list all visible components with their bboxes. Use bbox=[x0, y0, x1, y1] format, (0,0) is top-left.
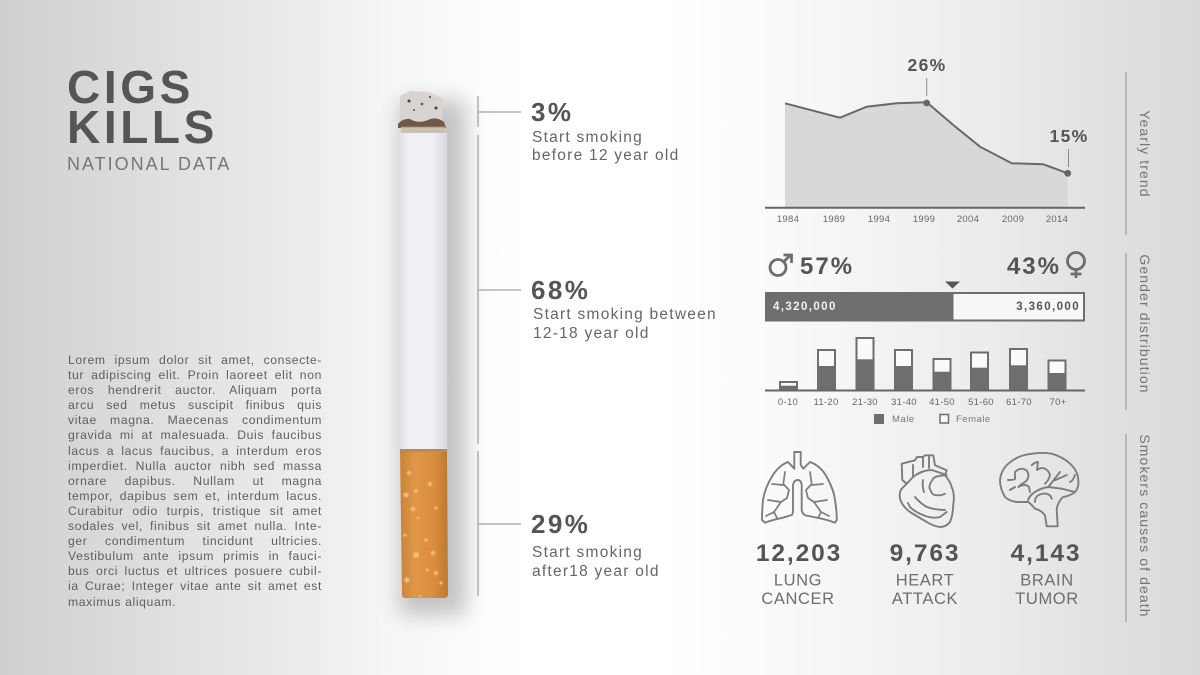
body text bbox=[68, 353, 322, 608]
icon: heart bbox=[900, 455, 954, 527]
area chart: yearly trend: 1999 bbox=[913, 214, 935, 225]
area chart: yearly trend: 26% bbox=[908, 55, 946, 75]
body text: sodales vel, finibus sit amet nulla. Inte- bbox=[68, 519, 322, 533]
body text: eros hendrerit auctor. Aliquam porta bbox=[68, 383, 322, 397]
age bar chart: 70+ bbox=[1049, 397, 1067, 408]
icon: brain bbox=[1000, 453, 1078, 526]
legend bbox=[874, 414, 991, 425]
gender split bar bbox=[765, 282, 1084, 322]
deaths: heart attack: 9,763 bbox=[890, 540, 960, 567]
stat: 68%: 12-18 year old bbox=[533, 325, 650, 342]
body text: ia Curae; Integer vitae ante sit amet est bbox=[68, 579, 322, 593]
body text: maximus aliquam. bbox=[68, 594, 176, 608]
deaths: heart attack: ATTACK bbox=[892, 590, 958, 608]
stat: 29% bbox=[531, 509, 660, 580]
age bar chart: 61-70 bbox=[1006, 397, 1032, 408]
legend: Female bbox=[956, 414, 991, 425]
stat: 3%: before 12 year old bbox=[532, 147, 679, 164]
title: NATIONAL DATA bbox=[67, 154, 231, 174]
stat: 29%: 29% bbox=[531, 509, 590, 539]
age bar chart: 0-10 bbox=[778, 397, 798, 408]
deaths: lung cancer: CANCER bbox=[761, 590, 835, 608]
body text: bus orci luctus et ultrices posuere cubil- bbox=[68, 564, 322, 578]
deaths: heart attack bbox=[890, 540, 960, 608]
body text: Lorem ipsum dolor sit amet, consecte- bbox=[68, 353, 322, 367]
legend: Male bbox=[892, 414, 915, 425]
cigarette bbox=[398, 91, 466, 615]
body text: ornare dapibus. Nullam ut magna bbox=[68, 474, 322, 488]
stat: 68%: Start smoking between bbox=[533, 306, 717, 323]
body text: ger condimentum tincidunt ultricies. bbox=[68, 534, 322, 548]
age bar chart: 21-30 bbox=[852, 397, 878, 408]
age bar chart bbox=[765, 338, 1085, 425]
deaths: brain tumor: BRAIN bbox=[1020, 572, 1074, 590]
section label: yearly trend: Yearly trend bbox=[1137, 110, 1153, 198]
deaths: brain tumor bbox=[1011, 540, 1081, 608]
gender percentages: 43% bbox=[1007, 253, 1061, 280]
section rules bbox=[1125, 72, 1127, 622]
bracket lines bbox=[478, 96, 521, 596]
deaths: brain tumor: 4,143 bbox=[1011, 540, 1081, 567]
stat: 3%: Start smoking bbox=[532, 129, 643, 146]
icon: lungs bbox=[762, 452, 837, 523]
section label: gender distribution: Gender distribution bbox=[1137, 254, 1153, 394]
age bar chart: 31-40 bbox=[891, 397, 917, 408]
area chart: yearly trend bbox=[765, 55, 1088, 225]
cigarette paper bbox=[398, 133, 447, 449]
section label: smokers causes of death: Smokers causes of death bbox=[1137, 434, 1153, 618]
title bbox=[67, 61, 231, 174]
stat: 68%: 68% bbox=[531, 275, 590, 305]
cigarette filter bbox=[400, 449, 448, 598]
gender split bar: 4,320,000 bbox=[773, 301, 837, 313]
title: KILLS bbox=[67, 101, 218, 153]
body text: arcu sed metus suscipit finibus quis bbox=[68, 398, 322, 412]
stat: 29%: after18 year old bbox=[532, 563, 660, 580]
area chart: yearly trend: 2014 bbox=[1046, 214, 1068, 225]
body text: imperdiet. Nulla auctor nibh sed massa bbox=[68, 459, 322, 473]
age bar chart: 11-20 bbox=[813, 397, 839, 408]
stat: 3%: 3% bbox=[531, 97, 573, 127]
body text: lacus a lacus faucibus, a interdum eros bbox=[68, 444, 322, 458]
stat: 3% bbox=[531, 97, 679, 164]
body text: Curabitur odio turpis, tristique sit amet bbox=[68, 504, 322, 518]
icon: male symbol bbox=[770, 254, 792, 276]
deaths: lung cancer: LUNG bbox=[774, 572, 822, 590]
body text: gravida mi at malesuada. Duis faucibus bbox=[68, 428, 322, 442]
title: CIGS bbox=[67, 61, 194, 113]
body text: vitae magna. Maecenas condimentum bbox=[68, 413, 322, 427]
area chart: yearly trend: 15% bbox=[1050, 126, 1088, 146]
area chart: yearly trend: 1984 bbox=[777, 214, 799, 225]
body text: Vestibulum ante ipsum primis in fauci- bbox=[68, 549, 322, 563]
age bar chart: 51-60 bbox=[968, 397, 994, 408]
age bar chart: 41-50 bbox=[929, 397, 955, 408]
area chart: yearly trend: 2004 bbox=[957, 214, 979, 225]
deaths: brain tumor: TUMOR bbox=[1015, 590, 1079, 608]
gender percentages: 57% bbox=[800, 253, 854, 280]
area chart: yearly trend: 1989 bbox=[823, 214, 845, 225]
stat: 29%: Start smoking bbox=[532, 544, 643, 561]
gender split bar: 3,360,000 bbox=[1016, 301, 1080, 313]
cigarette ash tip bbox=[398, 91, 446, 133]
gender percentages bbox=[770, 252, 1084, 280]
body text: tur adipiscing elit. Proin laoreet elit non bbox=[68, 368, 322, 382]
stat: 68% bbox=[531, 275, 717, 342]
body text: tempor, dapibus sem et, interdum lacus. bbox=[68, 489, 322, 503]
deaths: heart attack: HEART bbox=[896, 572, 954, 590]
icon: female symbol bbox=[1068, 252, 1084, 278]
deaths: lung cancer bbox=[756, 540, 842, 608]
area chart: yearly trend: 2009 bbox=[1002, 214, 1024, 225]
area chart: yearly trend: 1994 bbox=[868, 214, 890, 225]
deaths: lung cancer: 12,203 bbox=[756, 540, 842, 567]
